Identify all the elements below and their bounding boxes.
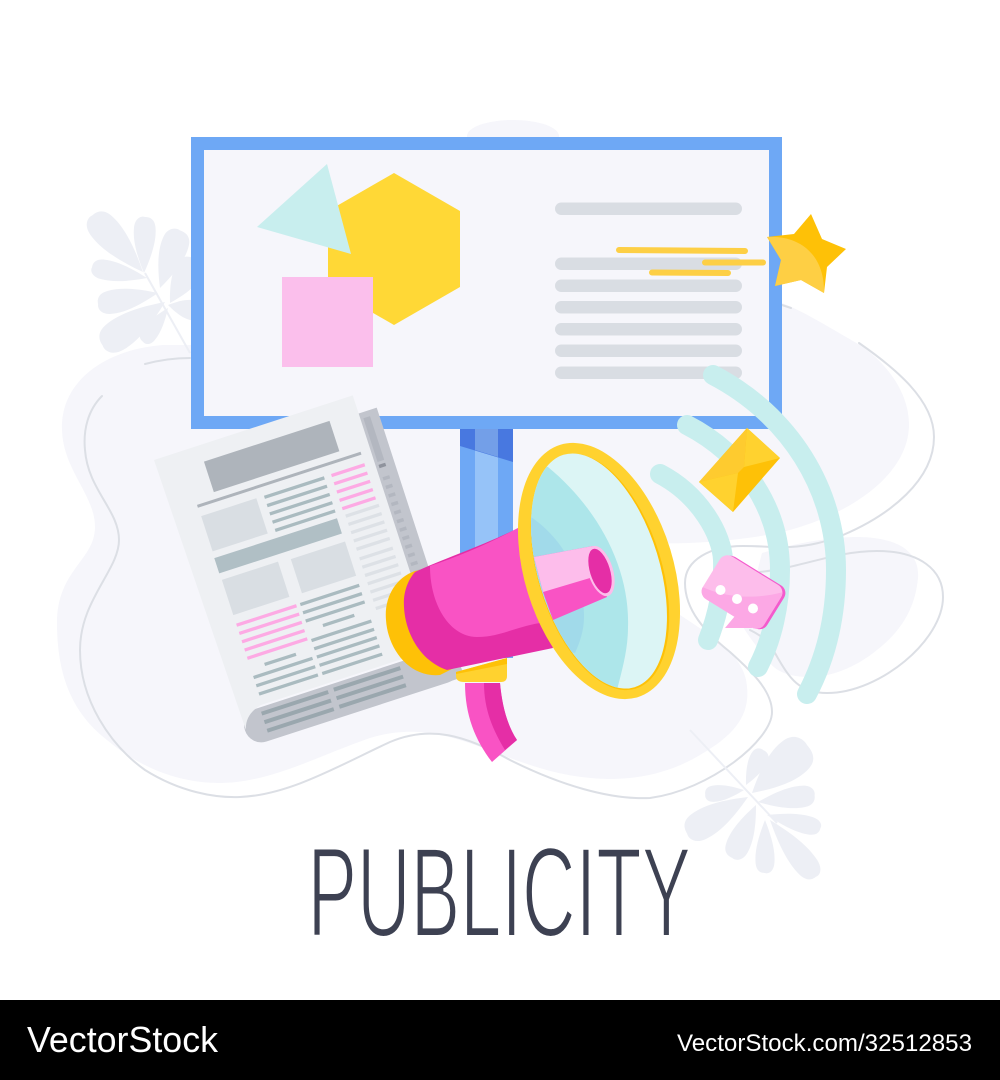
signal arcs [660, 375, 836, 694]
back page and roll [163, 408, 464, 747]
footer brand: VectorStock [27, 1019, 219, 1060]
text lines on billboard [555, 202, 742, 379]
icon: chat bubble [702, 555, 786, 630]
body text lines [201, 476, 383, 696]
title: PUBLICITY [308, 822, 691, 965]
footer bar [0, 1000, 1000, 1080]
billboard post [460, 425, 513, 658]
images [201, 476, 356, 616]
megaphone handle [465, 683, 517, 762]
leaves: top left [81, 205, 207, 359]
icon: envelope [699, 428, 780, 512]
yellow highlight strokes [619, 250, 763, 273]
hexagon [328, 173, 460, 325]
square [282, 277, 373, 367]
horn rim [489, 423, 709, 719]
dark lines on roll [261, 666, 407, 733]
star [767, 214, 846, 293]
footer url: VectorStock.com/32512853 [677, 1030, 972, 1057]
newspaper [154, 390, 464, 748]
leaves: bottom right [679, 730, 825, 885]
tube mouth [581, 542, 620, 600]
side dashes [378, 463, 421, 575]
headline [204, 421, 339, 492]
triangle [257, 164, 351, 254]
billboard panel [198, 144, 776, 422]
horn interior [531, 454, 667, 688]
light column lines [345, 504, 410, 610]
handle bracket [456, 658, 507, 682]
megaphone [386, 442, 680, 762]
megaphone body [404, 527, 553, 670]
back cap [386, 570, 470, 675]
front page [154, 395, 441, 731]
decorative outlines [80, 305, 943, 798]
inner tube [534, 546, 607, 620]
background blobs [57, 120, 918, 783]
pink text lines [201, 463, 411, 660]
sub headline [214, 518, 342, 573]
